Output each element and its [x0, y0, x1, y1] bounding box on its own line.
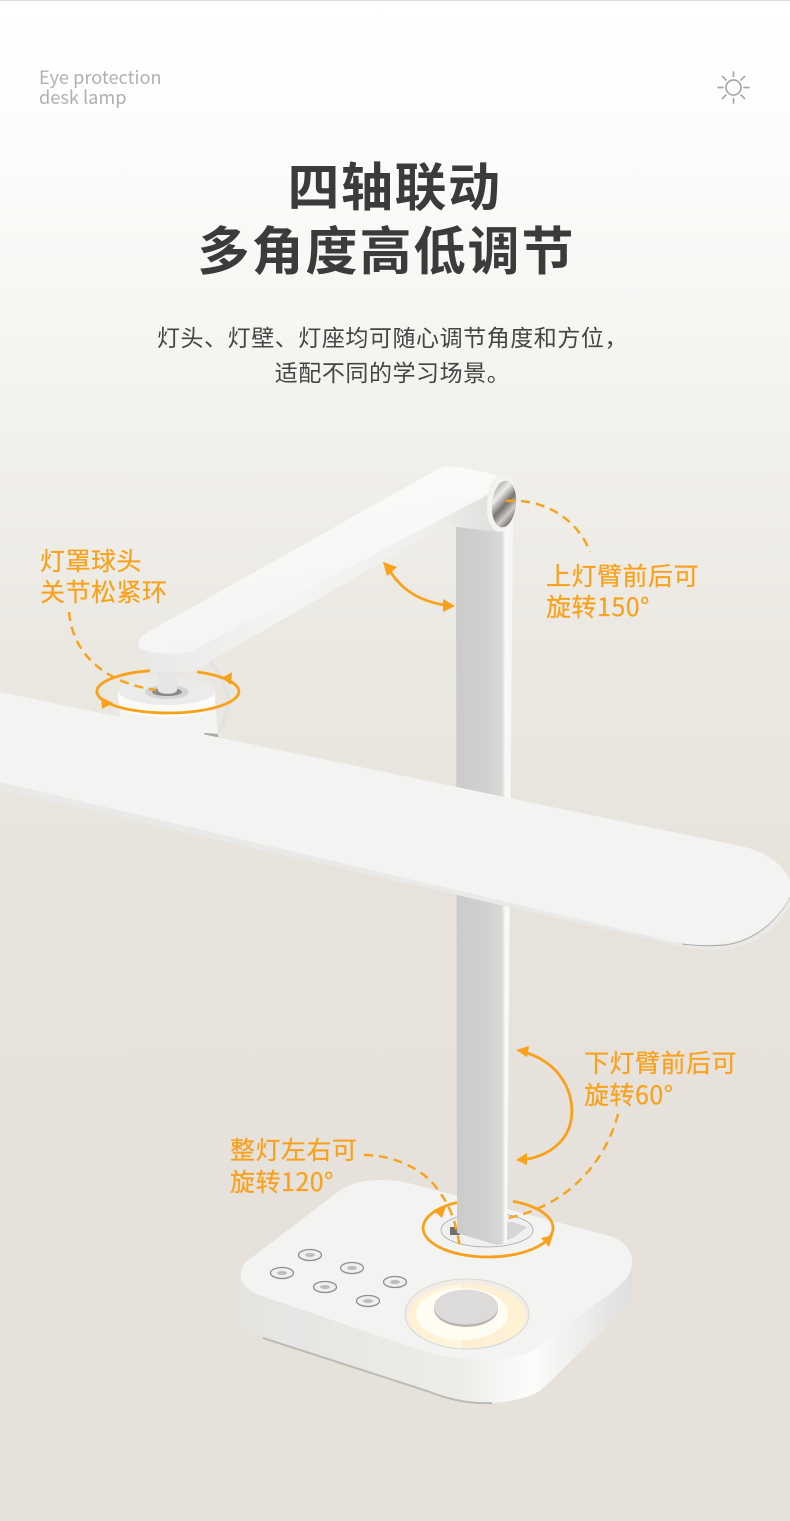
arm top face	[138, 466, 498, 654]
title	[197, 146, 576, 285]
callout: lower arm: 旋转60°	[584, 1076, 674, 1112]
callout: upper arm: 旋转150°	[546, 588, 650, 624]
arrow: lower arm arc	[516, 1046, 572, 1165]
lamp head panel	[0, 692, 790, 950]
arrow ring	[423, 1201, 553, 1257]
title: 多角度高低调节	[197, 210, 576, 285]
ball joint clamp	[118, 668, 218, 738]
upper arm	[138, 466, 520, 672]
icon: sun	[718, 72, 749, 103]
callout: base rotation: 整灯左右可	[230, 1131, 358, 1167]
callout: head joint	[40, 542, 239, 713]
callout: upper arm: 上灯臂前后可	[546, 557, 699, 593]
base socket	[441, 1213, 533, 1247]
subtitle	[157, 319, 628, 388]
subtitle: 灯头、灯壁、灯座均可随心调节角度和方位，	[157, 319, 628, 353]
callout: upper arm	[383, 501, 699, 624]
callout: lower arm: 下灯臂前后可	[584, 1044, 737, 1080]
callout: head joint: 关节松紧环	[40, 573, 168, 609]
brand label	[39, 64, 162, 110]
lamp pole	[456, 520, 513, 1245]
touch buttons	[270, 1250, 406, 1306]
lamp	[0, 466, 790, 1403]
brand label: desk lamp	[39, 84, 127, 110]
title: 四轴联动	[287, 146, 502, 221]
callout: lower arm	[508, 1044, 737, 1218]
callout: head joint: 灯罩球头	[40, 542, 142, 578]
brand label: Eye protection	[39, 64, 162, 90]
callout: base rotation	[230, 1131, 553, 1257]
callout: base rotation: 旋转120°	[230, 1163, 334, 1199]
lamp base	[240, 1180, 633, 1403]
cord	[209, 660, 228, 732]
arrow: upper arm arc	[383, 562, 455, 612]
arrow ring	[97, 671, 239, 713]
arm underside	[138, 490, 498, 672]
glowing ring	[405, 1279, 529, 1349]
icon: metal joint cap	[484, 475, 520, 533]
subtitle: 适配不同的学习场景。	[275, 354, 510, 388]
